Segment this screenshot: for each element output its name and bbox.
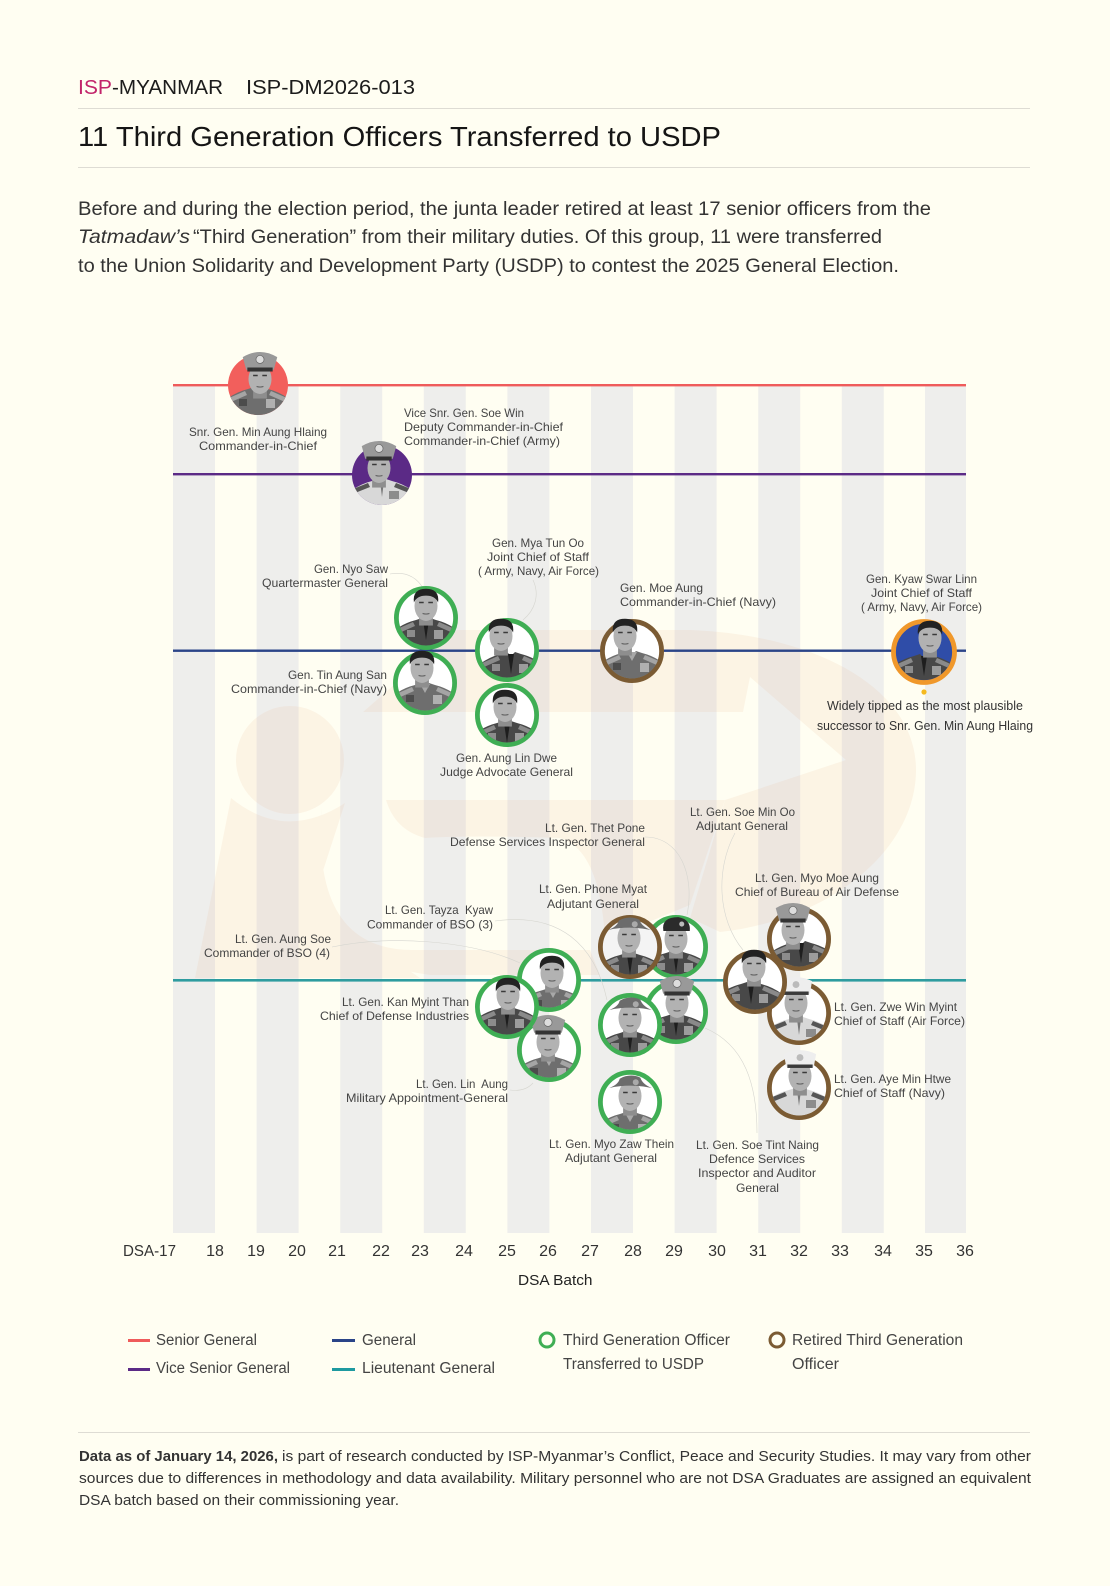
label: Moe Aung <box>620 581 776 609</box>
portrait: Zwe Win Myint <box>767 977 831 1049</box>
label: Nyo Saw: Quartermaster General <box>262 576 388 590</box>
label: Lin Aung: Lt. Gen. Lin Aung <box>416 1077 508 1091</box>
label: Kyaw Swar Linn: ( Army, Navy, Air Force) <box>861 600 982 614</box>
header: organisation and document code: -MYANMAR <box>112 77 223 99</box>
footer note: Data as of January 14, 2026, <box>79 1449 278 1465</box>
portrait: Soe Win <box>352 441 412 505</box>
x axis batch labels: 18 <box>206 1243 224 1260</box>
label: Aung Soe <box>204 932 331 960</box>
chart: officers by DSA batch and rank <box>123 352 1033 1289</box>
label: Mya Tun Oo: Joint Chief of Staff <box>487 550 590 564</box>
legend: Retired Third Generation Officer <box>770 1332 963 1373</box>
portrait: Soe Tint Naing <box>644 976 708 1046</box>
legend: Retired Third Generation Officer: Officer <box>792 1356 839 1373</box>
x axis batch labels: 23 <box>411 1243 429 1260</box>
label: Myo Moe Aung <box>735 871 899 899</box>
x axis batch labels: 30 <box>708 1243 726 1260</box>
label: Kan Myint Than <box>320 995 469 1023</box>
watermark logo <box>195 630 916 978</box>
x axis batch labels: 29 <box>665 1243 683 1260</box>
label: Aung Soe: Lt. Gen. Aung Soe <box>235 932 331 946</box>
x axis batch labels: 36 <box>956 1243 974 1260</box>
footer note <box>79 1449 1031 1509</box>
marker dot <box>921 689 927 695</box>
portrait: Mya Tun Oo <box>477 619 543 684</box>
portrait: Myo Moe Aung <box>769 903 833 973</box>
portrait: Tin Aung San <box>393 651 457 715</box>
label: Zwe Win Myint: Chief of Staff (Air Force) <box>834 1014 965 1028</box>
label: Tin Aung San: Gen. Tin Aung San <box>288 668 387 682</box>
label: Soe Min Oo <box>690 805 795 833</box>
label: Myo Zaw Thein: Adjutant General <box>565 1151 657 1165</box>
rank line: General <box>173 650 966 652</box>
legend: Third Generation Officer Transferred to USDP: Third Generation Officer <box>563 1332 730 1349</box>
rank line: Senior General <box>173 384 966 386</box>
title: 11 Third Generation Officers Transferred to USDP <box>78 121 721 152</box>
x axis batch labels: 24 <box>455 1243 473 1260</box>
legend: General <box>332 1332 416 1349</box>
portrait: Kyaw Swar Linn <box>892 621 956 686</box>
portrait: Soe Min Oo <box>719 950 785 1014</box>
label: Moe Aung: Gen. Moe Aung <box>620 581 703 595</box>
label: Lin Aung <box>346 1077 508 1105</box>
label: Soe Min Oo: Adjutant General <box>696 819 788 833</box>
label: Aung Lin Dwe <box>440 751 573 779</box>
x axis batch labels: 19 <box>247 1243 265 1260</box>
label: Min Aung Hlaing: Snr. Gen. Min Aung Hlaing <box>189 425 327 439</box>
label: Moe Aung: Commander-in-Chief (Navy) <box>620 595 776 609</box>
label: Tin Aung San: Commander-in-Chief (Navy) <box>231 682 387 696</box>
label: Soe Tint Naing: Inspector and Auditor <box>698 1166 816 1180</box>
label: Soe Tint Naing: Defence Services <box>709 1152 805 1166</box>
portrait: Aung Lin Dwe <box>475 685 539 753</box>
legend: General: General <box>362 1332 416 1349</box>
x axis batch labels <box>123 1243 974 1260</box>
label: Kyaw Swar Linn <box>861 572 982 614</box>
portrait: Min Aung Hlaing <box>228 352 288 415</box>
legend: Senior General: Senior General <box>156 1332 257 1349</box>
legend: Lieutenant General: Lieutenant General <box>362 1360 495 1377</box>
x axis batch labels: 31 <box>749 1243 767 1260</box>
label: Soe Min Oo: Lt. Gen. Soe Min Oo <box>690 805 795 819</box>
label: Thet Pone: Lt. Gen. Thet Pone <box>545 821 645 835</box>
label: Tayza Kyaw: Lt. Gen. Tayza Kyaw <box>385 903 493 917</box>
portrait: Aye Min Htwe <box>767 1050 831 1120</box>
label: Soe Win: Deputy Commander-in-Chief <box>404 420 564 434</box>
label: Aye Min Htwe: Lt. Gen. Aye Min Htwe <box>834 1072 951 1086</box>
x axis batch labels: 20 <box>288 1243 306 1260</box>
grey batch bands <box>173 385 966 1233</box>
x axis batch labels: 32 <box>790 1243 808 1260</box>
header: organisation and document code: ISP-DM2026-013 <box>246 77 415 99</box>
x axis batch labels: 27 <box>581 1243 599 1260</box>
label: Min Aung Hlaing <box>189 425 327 453</box>
rank line: Vice Senior General <box>173 473 966 475</box>
x axis batch labels: 21 <box>328 1243 346 1260</box>
label: Aung Lin Dwe: Gen. Aung Lin Dwe <box>456 751 557 765</box>
footer note: sources due to differences in methodology and data availability. Military personnel who are not DSA Graduates are assigned an equivalent <box>79 1471 1031 1487</box>
label: Aye Min Htwe: Chief of Staff (Navy) <box>834 1086 945 1100</box>
portrait: Tayza Kyaw <box>598 995 662 1063</box>
footer note: is part of research conducted by ISP-Myanmar’s Conflict, Peace and Security Studies. It may vary from other <box>282 1449 1031 1465</box>
intro paragraph: “Third Generation” from their military duties. Of this group, 11 were transferred <box>193 226 882 248</box>
label: Lin Aung: Military Appointment-General <box>346 1091 508 1105</box>
label: Phone Myat <box>539 882 648 911</box>
label: Thet Pone: Defense Services Inspector General <box>450 835 645 849</box>
label: Mya Tun Oo: Gen. Mya Tun Oo <box>492 536 584 550</box>
callout: successor note <box>817 699 1033 733</box>
label: Nyo Saw <box>262 562 388 590</box>
x axis batch labels: 22 <box>372 1243 390 1260</box>
portrait: Nyo Saw <box>394 588 458 650</box>
label: Nyo Saw: Gen. Nyo Saw <box>314 562 388 576</box>
legend: Retired Third Generation Officer: Retired Third Generation <box>792 1332 963 1349</box>
label: Phone Myat: Adjutant General <box>547 897 639 911</box>
label: Kyaw Swar Linn: Joint Chief of Staff <box>871 586 973 600</box>
portrait: Aung Soe <box>517 948 581 1012</box>
label: Myo Zaw Thein <box>549 1137 674 1165</box>
label: Aye Min Htwe <box>834 1072 951 1100</box>
portrait: Myo Zaw Thein <box>598 1070 662 1134</box>
label: Zwe Win Myint: Lt. Gen. Zwe Win Myint <box>834 1000 958 1014</box>
label: Kan Myint Than: Lt. Gen. Kan Myint Than <box>342 995 469 1009</box>
header: organisation and document code <box>78 77 415 99</box>
x axis batch labels: 28 <box>624 1243 642 1260</box>
legend: Vice Senior General: Vice Senior General <box>156 1360 290 1377</box>
label: Zwe Win Myint <box>834 1000 965 1028</box>
portrait: Kan Myint Than <box>475 977 539 1039</box>
x axis batch labels: 34 <box>874 1243 892 1260</box>
footer note: DSA batch based on their commissioning year. <box>79 1493 399 1509</box>
label: Soe Tint Naing: General <box>736 1181 779 1195</box>
legend: Third Generation Officer Transferred to USDP: Transferred to USDP <box>563 1356 704 1373</box>
header: organisation and document code: ISP <box>78 77 112 99</box>
x axis title: DSA Batch <box>518 1272 592 1289</box>
portrait: Thet Pone <box>653 915 708 978</box>
label: Myo Moe Aung: Chief of Bureau of Air Defense <box>735 885 899 899</box>
label: Mya Tun Oo <box>478 536 599 578</box>
label: Soe Tint Naing: Lt. Gen. Soe Tint Naing <box>696 1138 819 1152</box>
label: Tayza Kyaw: Commander of BSO (3) <box>367 918 493 932</box>
label: Phone Myat: Lt. Gen. Phone Myat <box>539 882 648 896</box>
legend: Third Generation Officer Transferred to USDP <box>540 1332 730 1373</box>
x axis batch labels: 26 <box>539 1243 557 1260</box>
x axis batch labels: 33 <box>831 1243 849 1260</box>
label: Soe Win: Vice Snr. Gen. Soe Win <box>404 406 524 420</box>
callout: successor note: successor to Snr. Gen. Min Aung Hlaing <box>817 719 1033 733</box>
label: Myo Zaw Thein: Lt. Gen. Myo Zaw Thein <box>549 1137 674 1151</box>
leader lines <box>332 573 757 1133</box>
label: Soe Win <box>404 406 564 448</box>
label: Soe Win: Commander-in-Chief (Army) <box>404 434 560 448</box>
label: Tayza Kyaw <box>367 903 493 932</box>
x axis batch labels: DSA-17 <box>123 1243 176 1260</box>
label: Tin Aung San <box>231 668 387 696</box>
label: Min Aung Hlaing: Commander-in-Chief <box>199 439 318 453</box>
label: Thet Pone <box>450 821 645 849</box>
label: Kyaw Swar Linn: Gen. Kyaw Swar Linn <box>866 572 977 586</box>
label: Kan Myint Than: Chief of Defense Industries <box>320 1009 469 1023</box>
portrait: Moe Aung <box>600 619 664 683</box>
label: Aung Lin Dwe: Judge Advocate General <box>440 765 573 779</box>
intro paragraph: Before and during the election period, the junta leader retired at least 17 senior officers from the <box>78 198 931 220</box>
portrait: Phone Myat <box>598 917 662 985</box>
callout: successor note: Widely tipped as the most plausible <box>827 699 1023 713</box>
legend <box>128 1332 963 1377</box>
x axis batch labels: 25 <box>498 1243 516 1260</box>
label: Aung Soe: Commander of BSO (4) <box>204 946 330 960</box>
rank line: Lieutenant General <box>173 979 966 982</box>
label: Mya Tun Oo: ( Army, Navy, Air Force) <box>478 564 599 578</box>
intro paragraph: to the Union Solidarity and Development Party (USDP) to contest the 2025 General Election. <box>78 255 899 277</box>
x axis batch labels: 35 <box>915 1243 933 1260</box>
label: Soe Tint Naing <box>696 1138 819 1195</box>
label: Myo Moe Aung: Lt. Gen. Myo Moe Aung <box>755 871 879 885</box>
intro paragraph <box>78 198 931 277</box>
intro paragraph: Tatmadaw’s <box>78 226 190 248</box>
portrait: Lin Aung <box>517 1015 581 1088</box>
